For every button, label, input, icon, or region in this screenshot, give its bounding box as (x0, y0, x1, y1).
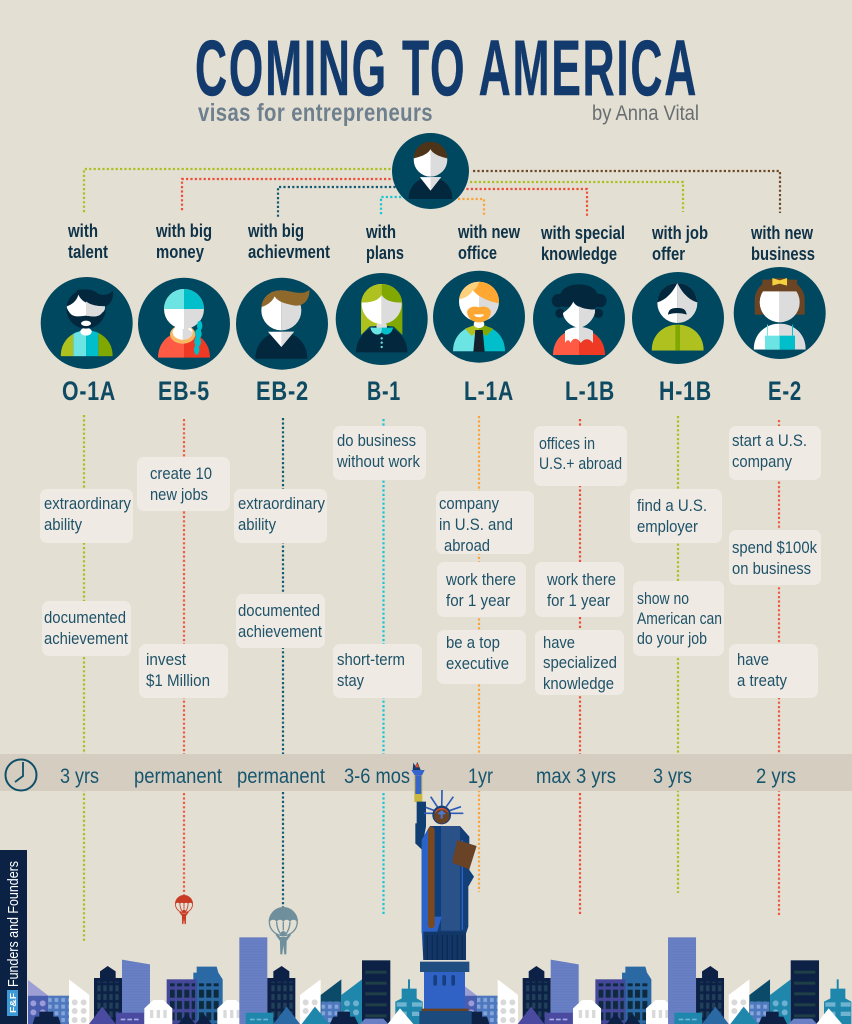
panel: EB-5 requirements (137, 457, 230, 698)
tablet (452, 840, 477, 869)
path labels: with (67, 221, 98, 241)
connector lines from founder to visa paths (84, 169, 780, 217)
visa names: L-1A (464, 376, 514, 406)
visa names: H-1B (659, 376, 712, 406)
panel: B-1 requirements (333, 426, 426, 698)
panel: EB-2 requirements: extraordinary (238, 494, 325, 513)
panel: E-2 requirements: on business (732, 559, 811, 578)
avatar: O-1A bearded man (41, 277, 133, 369)
path labels: offer (652, 244, 685, 264)
panel: EB-2 requirements (234, 489, 327, 648)
panel: H-1B requirements: find a U.S. (637, 496, 707, 515)
panel: H-1B requirements: American can (637, 609, 722, 628)
crown and head (424, 790, 463, 824)
torch (411, 762, 425, 802)
panel: L-1B requirements: specialized (543, 653, 617, 672)
panel: B-1 requirements: without work (336, 452, 420, 471)
panel: L-1A requirements (436, 491, 534, 684)
panel: H-1B requirements: employer (637, 517, 698, 536)
panel: E-2 requirements: spend $100k (732, 538, 817, 557)
panel: L-1A requirements: in U.S. and (439, 515, 513, 534)
durations: 3 yrs (653, 765, 692, 788)
robe (422, 826, 474, 960)
panel: EB-5 requirements: new jobs (150, 485, 208, 504)
panel: L-1B requirements (534, 426, 627, 695)
panel: L-1A requirements: for 1 year (446, 591, 510, 610)
panel: L-1A requirements: company (439, 494, 499, 513)
path labels: money (156, 242, 204, 262)
subtitle: visas for entrepreneurs (198, 99, 433, 127)
durations: max 3 yrs (536, 765, 616, 788)
panel: L-1B requirements: offices in (539, 434, 595, 453)
durations (60, 765, 796, 788)
durations: 1yr (468, 765, 493, 788)
visa names: E-2 (768, 376, 802, 406)
path labels: with (365, 222, 396, 242)
path labels: business (751, 244, 815, 264)
panel: E-2 requirements: a treaty (737, 671, 787, 690)
path labels (67, 221, 815, 264)
path labels: with new (457, 222, 521, 242)
skyline left (28, 937, 423, 1024)
panel: O-1A requirements: documented (44, 608, 126, 627)
path labels: knowledge (541, 244, 617, 264)
panel: O-1A requirements: achievement (44, 629, 128, 648)
icon: clock (6, 760, 36, 790)
path labels: with big (155, 221, 212, 241)
raised arm (415, 802, 426, 849)
panel: O-1A requirements: ability (44, 515, 82, 534)
panel: B-1 requirements: stay (337, 671, 364, 690)
panel: EB-5 requirements: invest (146, 650, 186, 669)
Funders and Founders badge (0, 850, 27, 1024)
panel: E-2 requirements: have (737, 650, 769, 669)
durations: permanent (237, 765, 325, 788)
avatar: H-1B man with mustache (632, 272, 724, 364)
path labels: with big (247, 221, 304, 241)
panel: B-1 requirements: short-term (337, 650, 405, 669)
visa names (62, 376, 802, 406)
byline: by Anna Vital (592, 102, 699, 125)
panel: L-1B requirements: for 1 year (547, 591, 610, 610)
visa names: O-1A (62, 376, 116, 406)
panel: L-1A requirements: work there (445, 570, 516, 589)
durations: permanent (134, 765, 222, 788)
visa names: B-1 (367, 376, 401, 406)
durations: 3-6 mos (344, 765, 410, 788)
visa names: EB-5 (158, 376, 210, 406)
panel: H-1B requirements (630, 489, 724, 656)
panel: E-2 requirements: company (732, 452, 792, 471)
visa names: EB-2 (256, 376, 309, 406)
avatar: EB-2 man with brown hair (236, 278, 328, 370)
panel: L-1B requirements: knowledge (543, 674, 614, 693)
path labels: plans (366, 243, 404, 263)
panel: E-2 requirements (729, 426, 821, 698)
icon: red parachutist (175, 895, 193, 924)
panel: L-1B requirements: U.S.+ abroad (539, 454, 622, 473)
panel: EB-2 requirements: ability (238, 515, 276, 534)
duration band (0, 754, 852, 791)
panel: L-1A requirements: abroad (444, 536, 490, 555)
path labels: talent (68, 242, 108, 262)
path labels: with new (750, 223, 814, 243)
panel: EB-5 requirements: create 10 (150, 464, 212, 483)
panel: O-1A requirements (40, 489, 133, 656)
panel: L-1A requirements: be a top (446, 633, 500, 652)
panel: B-1 requirements: do business (337, 431, 416, 450)
panel: L-1B requirements: have (543, 633, 575, 652)
Funders and Founders badge: F&F (9, 993, 18, 1013)
path labels: office (458, 243, 497, 263)
avatar: L-1B woman with curly hair (533, 273, 625, 365)
panel: EB-5 requirements: $1 Million (146, 671, 210, 690)
central founder avatar (392, 133, 469, 209)
vertical timelines (84, 415, 779, 943)
avatar: E-2 woman with brown hair and bow (734, 267, 826, 359)
path labels: with special (540, 223, 625, 243)
durations: 2 yrs (756, 765, 796, 788)
panel: L-1A requirements: executive (446, 654, 509, 673)
visa names: L-1B (565, 376, 615, 406)
panel: H-1B requirements: show no (637, 589, 689, 608)
avatar: B-1 woman with green hair (336, 273, 428, 365)
panel: EB-2 requirements: documented (238, 601, 320, 620)
durations: 3 yrs (60, 765, 99, 788)
panel: E-2 requirements: start a U.S. (732, 431, 807, 450)
avatar: L-1A man with orange hair and tie (433, 271, 525, 363)
panel: EB-2 requirements: achievement (238, 622, 322, 641)
Funders and Founders badge: Funders and Founders (5, 861, 22, 987)
skyline right (457, 937, 851, 1024)
statue of liberty (411, 762, 477, 1024)
avatar: EB-5 woman with braid (138, 278, 230, 370)
path labels: achievment (248, 242, 330, 262)
icon: grey parachutist (269, 908, 297, 954)
panel: O-1A requirements: extraordinary (44, 494, 131, 513)
panel: L-1B requirements: work there (546, 570, 616, 589)
path labels: with job (651, 223, 708, 243)
panel: H-1B requirements: do your job (637, 629, 707, 648)
pedestal (419, 962, 472, 1024)
